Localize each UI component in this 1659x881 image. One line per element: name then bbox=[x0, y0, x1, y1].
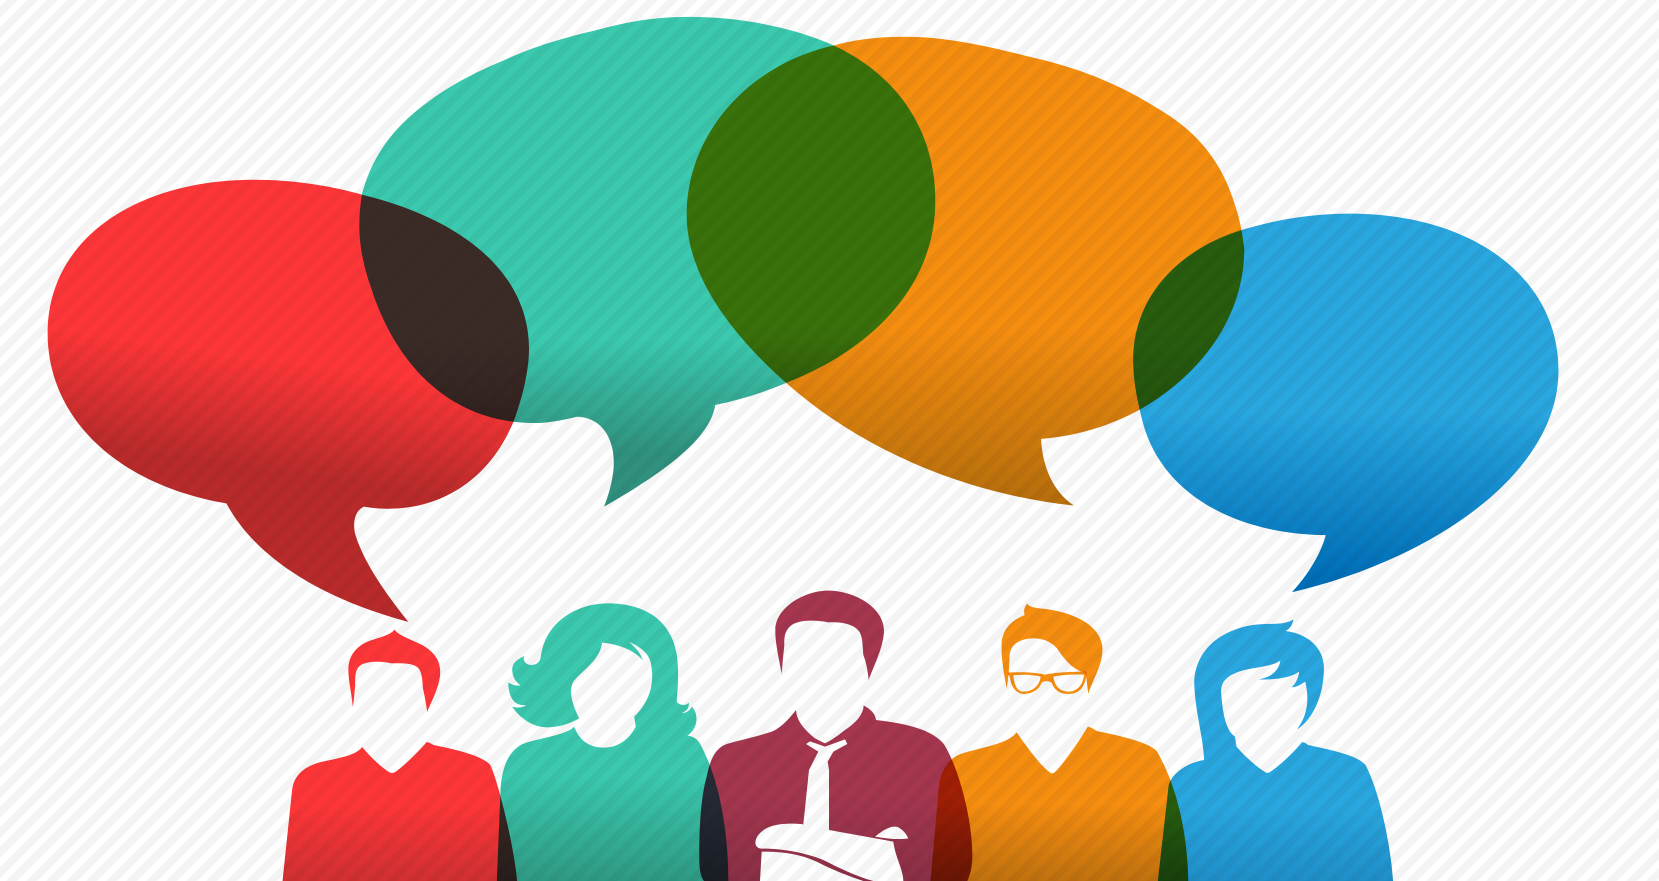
blue man silhouette bbox=[1158, 619, 1393, 881]
maroon man hair bbox=[775, 591, 884, 680]
orange man body bbox=[930, 727, 1188, 881]
person: red man bbox=[283, 629, 517, 881]
teal speech bubble bbox=[359, 17, 935, 507]
person: blue man bbox=[1158, 619, 1393, 881]
orange man hair bbox=[1002, 603, 1102, 694]
icon: glasses bbox=[1007, 672, 1087, 694]
red man body bbox=[283, 742, 517, 881]
maroon man body with tie and arm cutouts bbox=[699, 705, 972, 881]
orange speech bubble bbox=[687, 37, 1244, 506]
blue speech bubble bbox=[1133, 214, 1558, 592]
person: maroon man with tie and crossed arms bbox=[699, 591, 972, 881]
person: teal woman bbox=[497, 603, 728, 881]
person: orange man with glasses bbox=[930, 603, 1188, 881]
red speech bubble bbox=[48, 180, 529, 622]
speech bubbles bbox=[48, 17, 1558, 622]
teal woman silhouette bbox=[497, 603, 728, 881]
red man hair bbox=[348, 629, 440, 712]
